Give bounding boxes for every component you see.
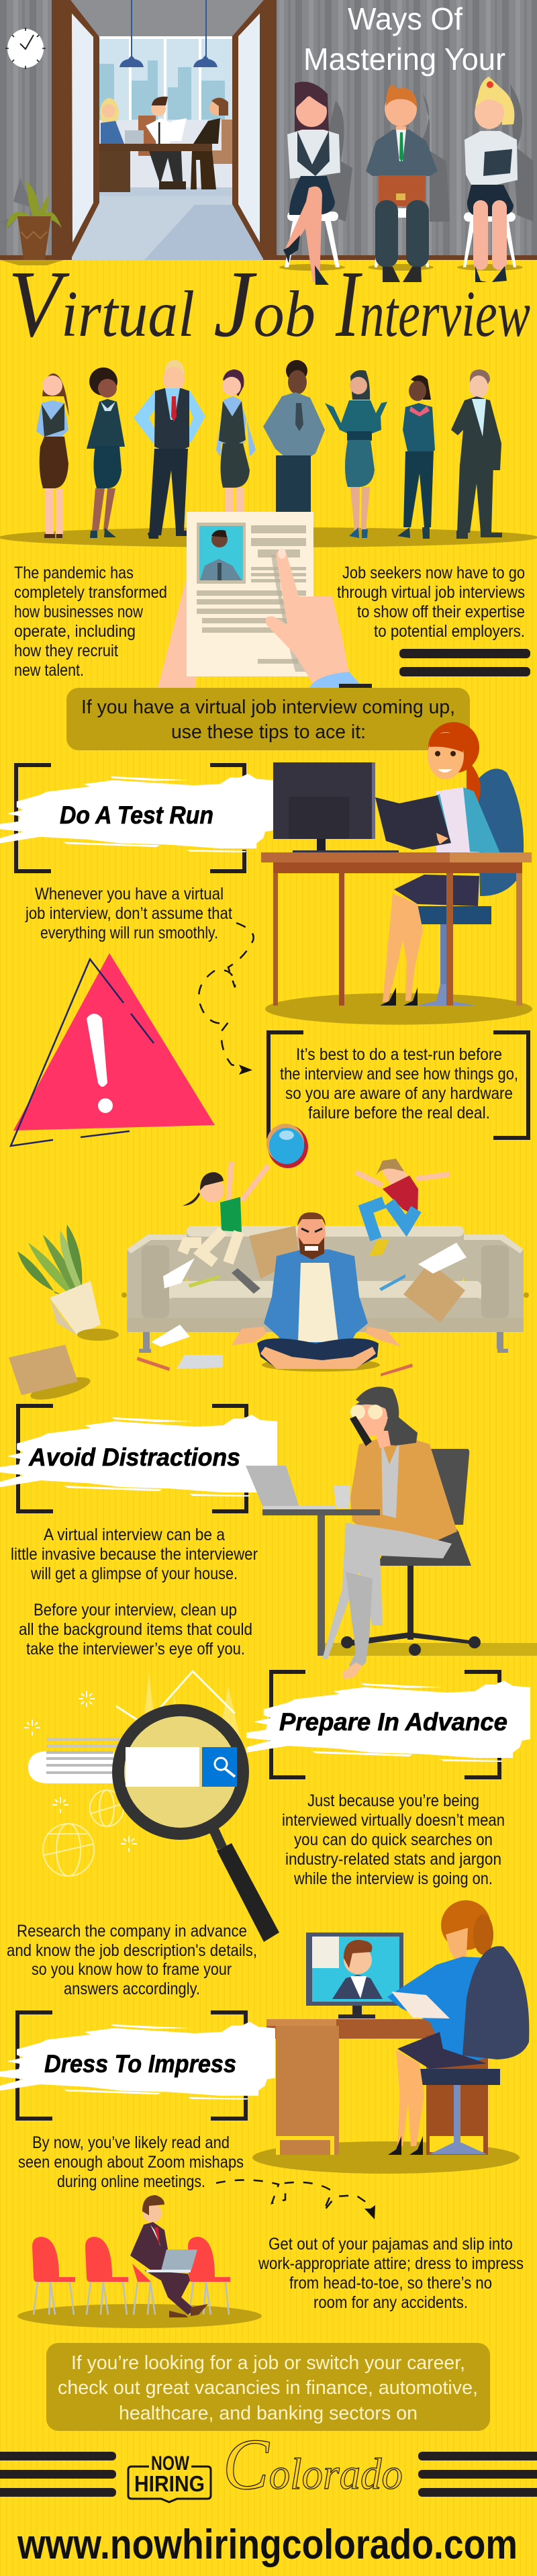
waiting candidates <box>279 77 534 285</box>
group of eight job seekers <box>0 360 537 547</box>
person 6 <box>325 370 387 538</box>
footer bars left <box>0 2452 116 2497</box>
tips banner: If you have a virtual job interview coming up, <box>81 697 455 718</box>
video interview desk scene <box>252 1900 529 2174</box>
glass door leaves <box>52 0 277 260</box>
red chairs <box>32 2237 230 2315</box>
lens <box>118 1710 243 1834</box>
intro text left: The pandemic has <box>14 564 134 582</box>
tip text: prepare in advance: interviewed virtually doesn’t mean <box>282 1811 505 1830</box>
logo: now hiring: NOW <box>151 2452 190 2475</box>
coffee cup <box>334 1486 350 1509</box>
sofa <box>121 1226 529 1376</box>
intro text left <box>14 564 167 680</box>
waiting room with red chairs <box>17 2195 262 2328</box>
tip text: dress code advice: from head-to-toe, so there’s no <box>289 2274 492 2293</box>
magnifying glass search illustration <box>24 1671 279 1942</box>
tip text: dress to impress: during online meetings. <box>57 2172 205 2191</box>
tip text: do a test run: Whenever you have a virtual <box>35 885 224 903</box>
arrow: dashed to advice <box>216 2180 375 2219</box>
call to action banner: check out great vacancies in finance, automotive, <box>58 2377 478 2399</box>
tip text: avoid distractions: all the background items that could <box>19 1620 252 1639</box>
icon: potted plant <box>0 178 64 265</box>
tip box: test run advice: so you are aware of any hardware <box>285 1084 513 1103</box>
tip text: do a test run <box>25 885 232 942</box>
tip text: dress code advice: Get out of your pajamas and slip into <box>268 2235 513 2254</box>
living room scene with kids <box>9 1124 529 1404</box>
handle <box>209 1828 227 1850</box>
globes <box>43 1790 124 1876</box>
laptop <box>246 1466 336 1509</box>
woman on phone with laptop <box>246 1386 537 1679</box>
tip text: prepare in advance: industry-related stats and jargon <box>285 1850 501 1869</box>
intro text right <box>337 564 530 676</box>
header scene: office wall <box>0 0 537 265</box>
desk <box>266 2019 488 2155</box>
person 3 <box>134 360 205 539</box>
research text: so you know how to frame your <box>32 1960 232 1979</box>
woman from behind <box>387 1900 529 2155</box>
heading: do a test run: Do A Test Run <box>60 801 213 829</box>
table top <box>262 1509 380 1515</box>
person 4 <box>216 369 256 518</box>
intro text left: completely transformed <box>14 583 167 602</box>
search bar in lens <box>126 1747 237 1787</box>
main title: virtual job interview: Job <box>213 251 315 357</box>
tips banner <box>66 688 470 750</box>
research text: answers accordingly. <box>64 1980 200 1998</box>
research text: and know the job description's details, <box>7 1941 257 1960</box>
sparkle stars <box>24 1691 137 1852</box>
tip box: test run advice <box>268 1032 528 1139</box>
call to action banner <box>46 2343 490 2431</box>
header title: ways of mastering your <box>303 1 505 77</box>
logo: colorado script: Colorado <box>223 2425 403 2505</box>
ball <box>266 1124 308 1168</box>
tip text: dress code advice: room for any accidents. <box>313 2293 468 2312</box>
heading: avoid distractions: Avoid Distractions <box>28 1444 240 1471</box>
header title: ways of mastering your: Mastering Your <box>303 42 505 77</box>
office room interior <box>72 0 263 260</box>
arrow: dashed loop to text box <box>199 923 254 1075</box>
plant fallen <box>9 1225 119 1404</box>
intro text left: new talent. <box>14 661 84 680</box>
research text: Research the company in advance <box>17 1922 247 1941</box>
person 2 <box>87 367 125 538</box>
jumping girl <box>183 1162 268 1263</box>
intro text left: how they recruit <box>14 641 118 660</box>
tip text: prepare in advance: you can do quick searches on <box>294 1830 493 1849</box>
main title: virtual job interview <box>8 251 530 357</box>
woman at computer desk <box>375 722 524 1006</box>
main title: virtual job interview: Virtual <box>8 251 195 357</box>
heading: avoid distractions <box>0 1406 277 1511</box>
intro text left: operate, including <box>14 622 136 641</box>
logo: now hiring <box>128 2452 211 2502</box>
tip text: prepare in advance: Just because you’re being <box>307 1791 479 1810</box>
heading: do a test run <box>0 765 273 871</box>
tip text: dress to impress <box>18 2133 244 2191</box>
jumping boy <box>356 1159 450 1256</box>
man with laptop <box>130 2195 208 2317</box>
research text <box>7 1922 257 1998</box>
candidate: man with briefcase <box>366 84 450 282</box>
heading: dress to impress: Dress To Impress <box>44 2050 236 2078</box>
tip text: avoid distractions <box>11 1525 258 1658</box>
candidate: woman with crossed arms <box>279 82 352 285</box>
tip text: dress code advice <box>258 2235 524 2312</box>
person 1 <box>36 373 69 538</box>
desk with monitor <box>261 762 532 1006</box>
logo: now hiring: HIRING <box>134 2471 205 2496</box>
tip text: dress to impress: seen enough about Zoom mishaps <box>18 2153 244 2172</box>
call to action banner: If you’re looking for a job or switch your career, <box>71 2352 465 2374</box>
tip text: dress to impress: By now, you’ve likely read and <box>32 2133 230 2152</box>
tip text: avoid distractions: little invasive because the interviewer <box>11 1545 258 1564</box>
tip text: do a test run: everything will run smoothly. <box>40 924 218 942</box>
icon: warning triangle <box>11 953 215 1146</box>
person 7 <box>397 375 435 539</box>
tip text: avoid distractions: Before your interview, clean up <box>34 1601 237 1619</box>
office chair <box>341 1449 481 1656</box>
person 8 <box>451 369 502 539</box>
tip text: avoid distractions: take the interviewer’s eye off you. <box>26 1640 245 1658</box>
floor ellipse under desk <box>265 993 532 1025</box>
header title: ways of mastering your: Ways Of <box>348 1 462 36</box>
heading: prepare in advance <box>246 1672 530 1777</box>
tip text: prepare in advance: while the interview is going on. <box>293 1869 493 1888</box>
tips banner: use these tips to ace it: <box>171 721 366 743</box>
tip text: avoid distractions: will get a glimpse of your house. <box>30 1564 238 1583</box>
tip text: do a test run: job interview, don’t assume that <box>25 904 232 923</box>
intro text left: how businesses now <box>14 603 144 621</box>
person 5 <box>263 360 325 523</box>
heading: prepare in advance: Prepare In Advance <box>279 1708 507 1736</box>
meeting table and people <box>81 97 247 192</box>
footer bars right <box>418 2452 537 2497</box>
candidate: blonde woman with tablet <box>457 77 534 282</box>
tip text: avoid distractions: A virtual interview can be a <box>44 1525 225 1544</box>
call to action banner: healthcare, and banking sectors on <box>119 2403 418 2424</box>
angry man meditating <box>232 1212 401 1372</box>
icon: wall clock <box>5 28 46 69</box>
resume held in hands <box>158 512 372 688</box>
tip box: test run advice: It’s best to do a test-run before <box>296 1045 502 1064</box>
tip text: prepare in advance <box>282 1791 505 1888</box>
heading: dress to impress <box>0 2012 275 2119</box>
tip box: test run advice: failure before the real deal. <box>308 1104 490 1122</box>
video call monitor <box>306 1933 403 2018</box>
